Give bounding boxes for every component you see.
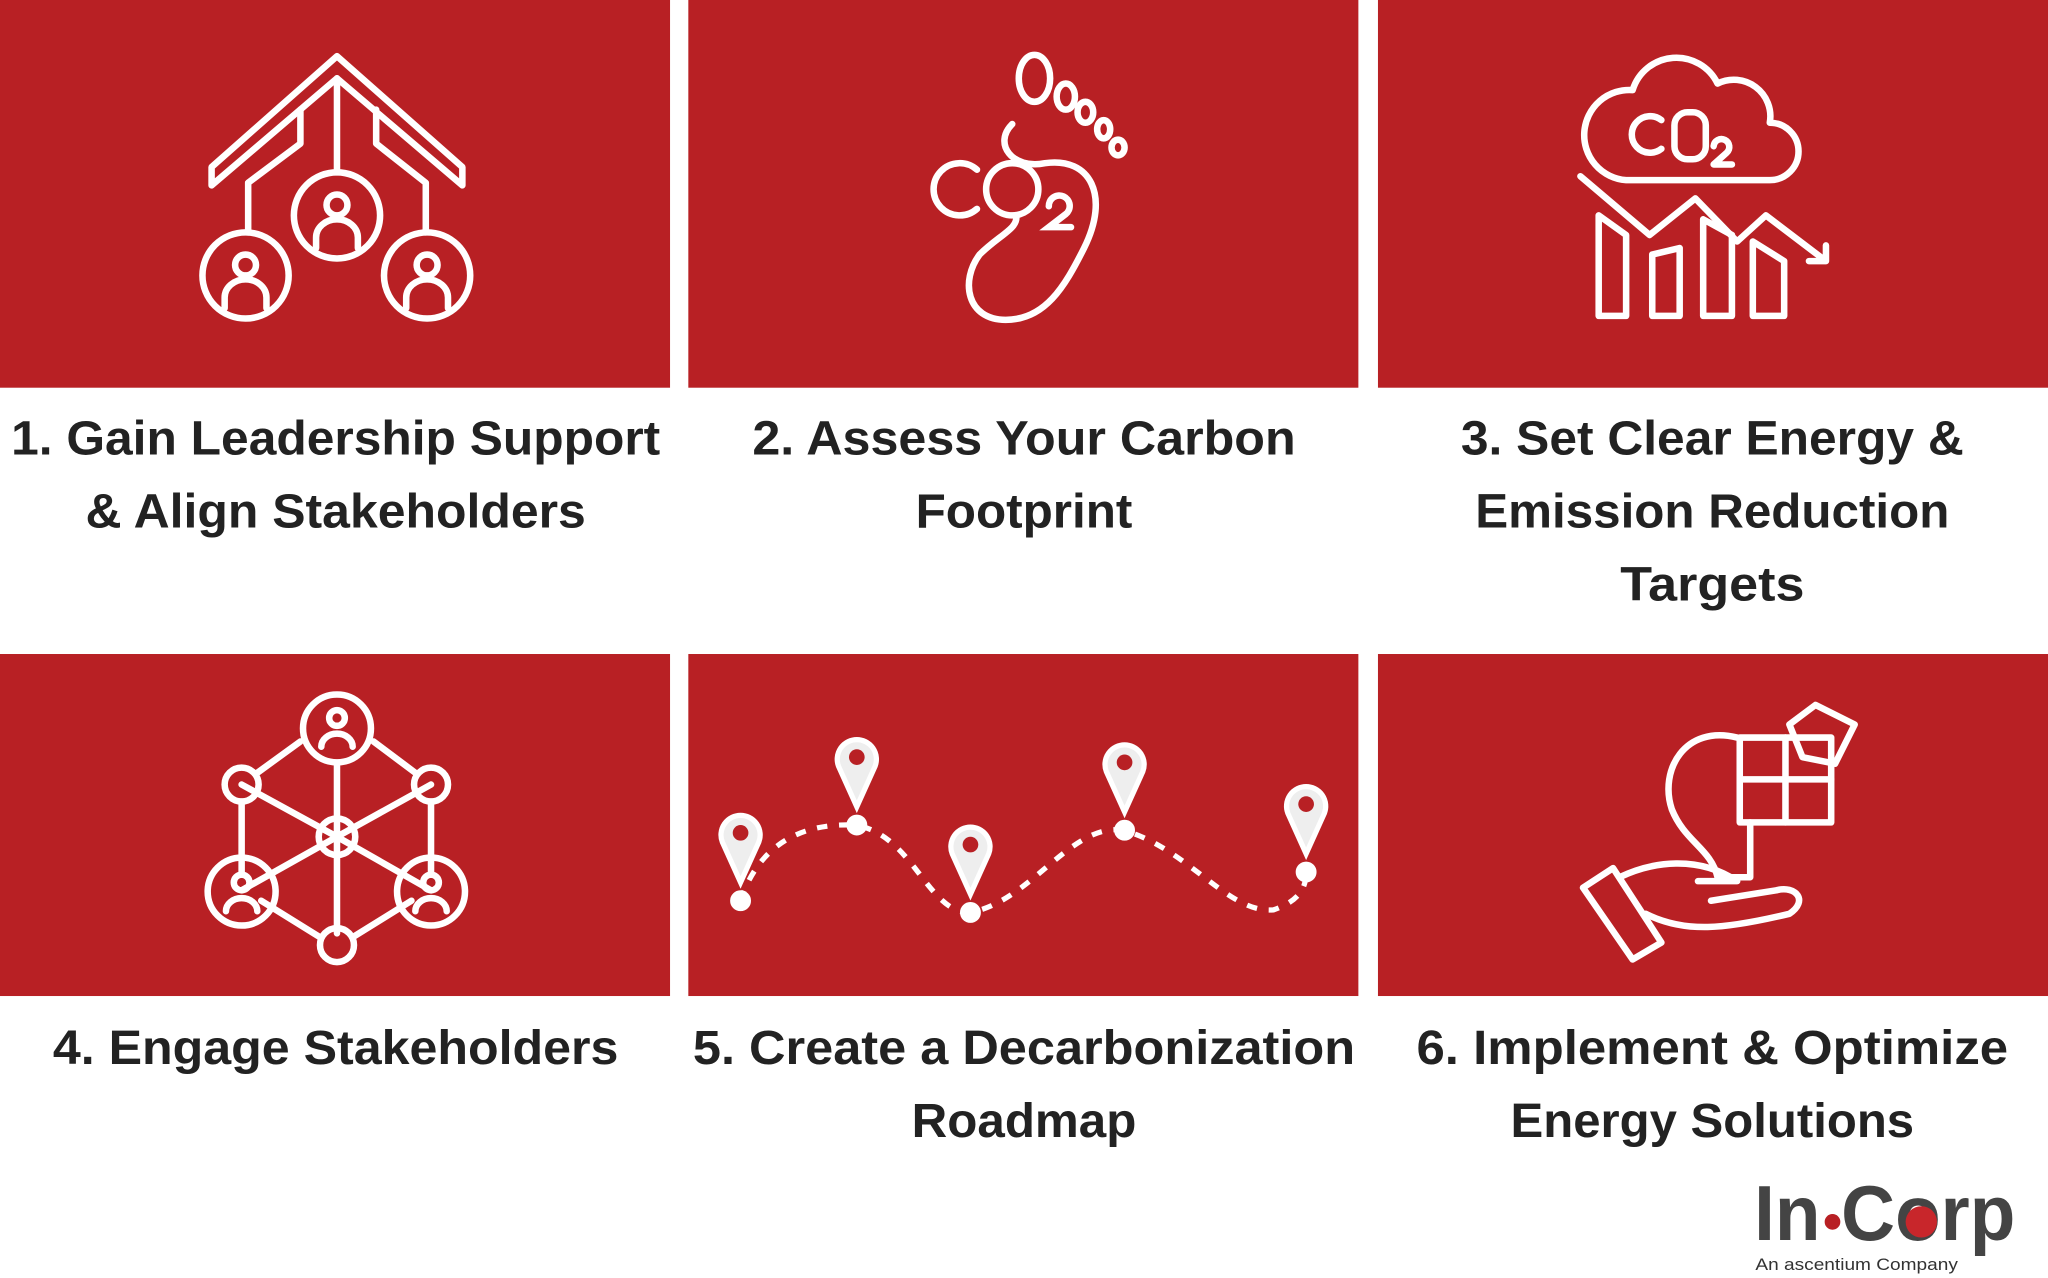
panel: step 2 xyxy=(688,0,1358,388)
logo: InCorp: In Corp xyxy=(1754,1169,2015,1257)
text: step 5 title xyxy=(693,1021,1355,1148)
text: step 2 title: Footprint xyxy=(916,484,1132,538)
text: step 2 title xyxy=(752,411,1296,538)
icon: CO2 cloud with declining bars xyxy=(1580,58,1826,316)
panel: step 3 xyxy=(1378,0,2048,388)
logo: InCorp: An ascentium Company xyxy=(1755,1255,1958,1274)
panel: step 4 xyxy=(0,654,670,996)
text: step 3 title xyxy=(1461,411,1964,611)
panel: step 5 xyxy=(688,654,1358,996)
icon: roadmap pins xyxy=(721,740,1326,920)
icon: leadership house xyxy=(202,56,470,319)
text: step 3 title: Emission Reduction xyxy=(1475,484,1949,538)
text: step 2 title: 2. Assess Your Carbon xyxy=(752,411,1296,465)
text: step 5 title: Roadmap xyxy=(912,1094,1136,1148)
panel: step 6 xyxy=(1378,654,2048,996)
icon: bulb puzzle hand xyxy=(1583,705,1855,959)
text: step 1 title xyxy=(11,411,660,538)
panel: step 1 xyxy=(0,0,670,388)
icon: stakeholder network xyxy=(208,694,465,962)
text: step 6 title: 6. Implement & Optimize xyxy=(1416,1021,2008,1075)
text: step 3 title: Targets xyxy=(1620,558,1804,611)
text: step 3 title: 3. Set Clear Energy & xyxy=(1461,411,1964,465)
text: step 6 title xyxy=(1416,1021,2008,1148)
text: step 4 title: 4. Engage Stakeholders xyxy=(53,1021,618,1075)
text: step 6 title: Energy Solutions xyxy=(1511,1094,1914,1148)
text: step 1 title: 1. Gain Leadership Support xyxy=(11,411,660,465)
icon: carbon footprint xyxy=(934,55,1125,320)
text: step 1 title: & Align Stakeholders xyxy=(86,484,586,538)
text: step 5 title: 5. Create a Decarbonization xyxy=(693,1021,1355,1075)
